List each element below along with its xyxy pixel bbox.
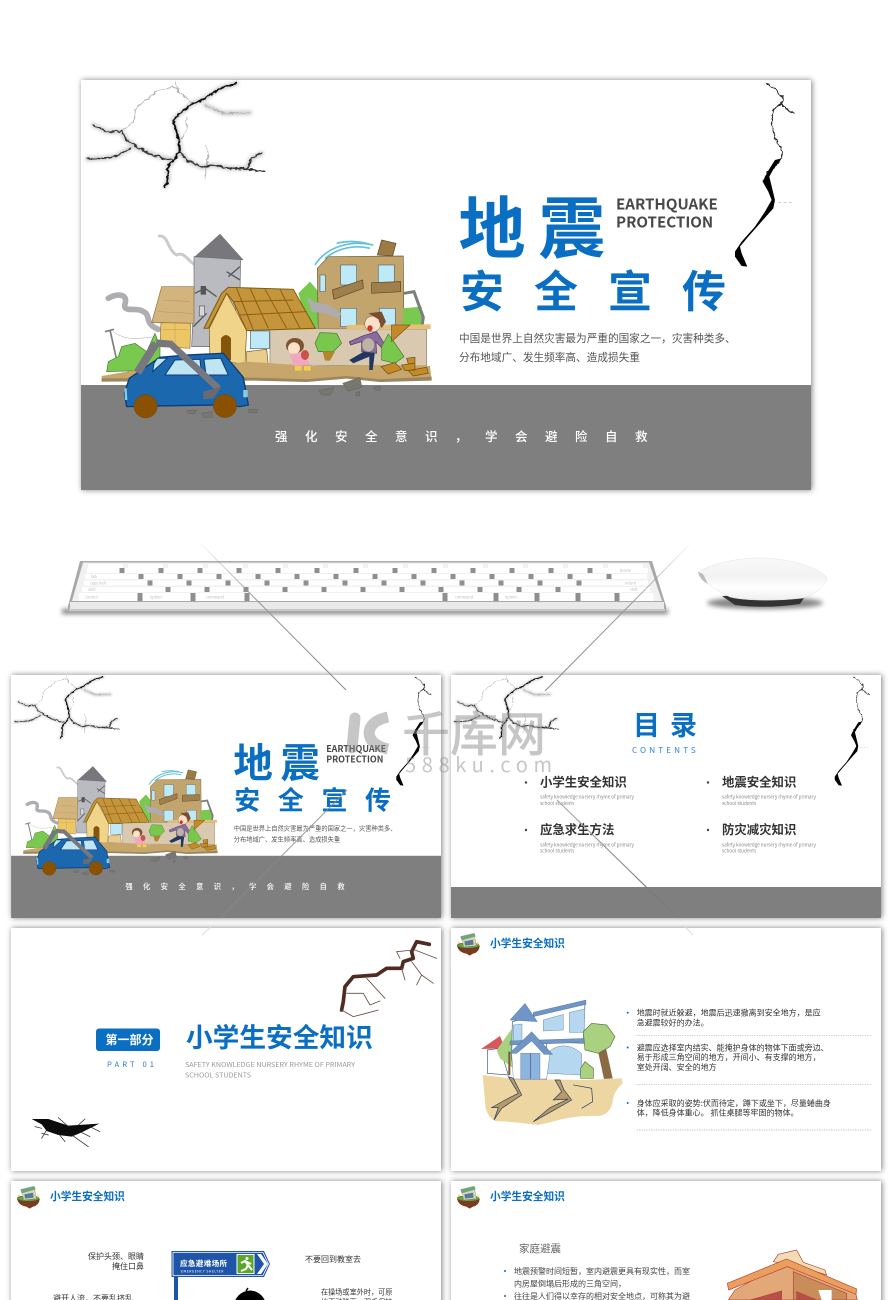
item 1: school students xyxy=(540,800,574,807)
bullet text 2 xyxy=(627,1042,829,1073)
bullet text 1: 急避震较好的办法。 xyxy=(637,1018,709,1029)
contents subtitle: CONTENTS xyxy=(632,744,699,756)
item 4: 防灾减灾知识 xyxy=(722,820,796,838)
thumbnail: knowledge slide xyxy=(451,928,881,1171)
item 3: school students xyxy=(540,847,574,854)
description: 中国是世界上自然灾害最为严重的国家之一，灾害种类多、 xyxy=(459,331,736,346)
keyboard: shift xyxy=(630,587,638,593)
sub heading: 家庭避震 xyxy=(519,1241,561,1256)
thumbnail english: PROTECTION xyxy=(326,752,383,765)
keyboard: tab xyxy=(91,574,97,580)
grey footer band xyxy=(81,385,811,490)
illustration: collapsed town scene xyxy=(102,234,432,418)
thumbnail: home shelter slide xyxy=(451,1181,881,1300)
thumbnail description: 中国是世界上自然灾害最为严重的国家之一，灾害种类多、 xyxy=(234,823,397,832)
thumbnail: shelter slide xyxy=(11,1181,441,1300)
bullet text 3: 身体应采取的姿势:伏而待定，蹲下或坐下，尽量蜷曲身 xyxy=(637,1098,831,1109)
crack left xyxy=(454,676,559,738)
footer slogan: 强化安全意识，学会避险自救 xyxy=(275,426,665,445)
watermark: 588ku.com xyxy=(405,749,552,778)
title: 安全宣传: 安全宣传 xyxy=(460,256,756,320)
section subtitle xyxy=(185,1059,355,1080)
item 1: safety knowledge nursery rhyme of primary xyxy=(540,794,634,801)
right tips xyxy=(305,1254,392,1300)
item 4 xyxy=(707,820,816,854)
subtitle: english xyxy=(616,192,718,232)
item 3: 应急求生方法 xyxy=(540,820,614,838)
crack xyxy=(15,676,119,738)
keyboard: caps lock xyxy=(90,580,107,586)
watermark xyxy=(352,695,552,778)
item 1: 小学生安全知识 xyxy=(540,772,627,790)
illustration: crack top right xyxy=(735,83,794,267)
header title: 小学生安全知识 xyxy=(490,936,565,951)
brown crack xyxy=(342,942,437,1017)
right tips: 在操场或室外时，可原 xyxy=(321,1288,392,1298)
black crack xyxy=(32,1118,100,1147)
item 4: school students xyxy=(722,847,756,854)
badge: part one xyxy=(96,1028,160,1051)
diagonal reflection lines xyxy=(197,540,693,935)
subtitle: english: PROTECTION xyxy=(616,210,713,232)
bullet text 2: 避震应选择室内结实、能掩护身体的物体下面或旁边、 xyxy=(637,1042,829,1053)
section subtitle: SAFETY KNOWLEDGE NURSERY RHYME OF PRIMARY xyxy=(185,1059,355,1069)
bullet list: 内房屋倒塌后形成的三角空间， xyxy=(514,1279,626,1290)
crack right xyxy=(835,677,869,786)
thumbnail slogan: 强化安全意识，学会避险自救 xyxy=(125,881,355,892)
section subtitle: SCHOOL STUDENTS xyxy=(185,1070,251,1080)
bullet list: 地震预警时间短暂，室内避震更具有现实性，而室 xyxy=(514,1266,690,1277)
item 1 xyxy=(525,772,634,807)
left tips: 掩住口鼻 xyxy=(112,1261,144,1272)
keyboard xyxy=(62,561,668,614)
item 2: 地震安全知识 xyxy=(722,772,796,790)
hero slide: earthquake cover xyxy=(81,80,811,490)
thumbnail description: 分布地域广、发生频率高、造成损失重 xyxy=(234,835,340,844)
item 2: school students xyxy=(722,800,756,807)
illustration: crack top left xyxy=(87,82,265,187)
keyboard: command xyxy=(455,594,473,600)
thumbnail: cover slide xyxy=(11,675,441,918)
subtitle: english: EARTHQUAKE xyxy=(616,192,718,214)
town scene xyxy=(23,766,218,875)
illustration: cracked house xyxy=(481,1000,623,1125)
part label: PART 01 xyxy=(107,1059,157,1070)
sign: emergency shelter xyxy=(172,1251,270,1300)
header icon xyxy=(17,1186,40,1209)
silhouette head xyxy=(234,1288,266,1300)
keyboard: command xyxy=(206,594,224,600)
bullet text 1: 地震时就近躲避，地震后迅速撤离到安全地方，是应 xyxy=(637,1008,821,1019)
header icon xyxy=(457,933,480,956)
badge: part one: 第一部分 xyxy=(106,1031,154,1048)
bullet text 1 xyxy=(627,1008,821,1029)
keyboard: option xyxy=(505,594,517,600)
item 4: safety knowledge nursery rhyme of primary xyxy=(722,841,816,848)
illustration: collapsed house xyxy=(727,1250,857,1300)
description: 分布地域广、发生频率高、造成损失重 xyxy=(459,350,640,365)
sign: emergency shelter: 应急避难场所 xyxy=(180,1258,227,1269)
header title: 小学生安全知识 xyxy=(50,1189,125,1204)
thumbnail title: 地震 xyxy=(233,732,328,789)
thumbnail heading: 安全宣传 xyxy=(234,780,409,818)
left tips: 保护头颈、眼睛 xyxy=(88,1251,144,1262)
item 3 xyxy=(525,820,634,854)
bullet text 2: 室处开阔、安全的地方 xyxy=(637,1062,717,1073)
thumbnail: contents slide xyxy=(451,675,881,918)
keyboard: option xyxy=(150,594,162,600)
sign: emergency shelter: EMERGENCY SHELTER xyxy=(181,1268,224,1274)
watermark: 千库网 xyxy=(402,695,546,765)
crack xyxy=(396,677,431,786)
keyboard: shift xyxy=(88,587,96,593)
contents title: 目录 xyxy=(633,704,707,743)
section title: 小学生安全知识 xyxy=(186,1016,373,1055)
bullet text 3: 体，降低身体重心。 抓住桌腿等牢固的物体。 xyxy=(637,1108,798,1119)
item 3: safety knowledge nursery rhyme of primary xyxy=(540,841,634,848)
thumbnail: section divider xyxy=(11,928,441,1171)
item 2 xyxy=(707,772,816,807)
divider xyxy=(637,1129,872,1131)
description xyxy=(459,331,736,365)
divider xyxy=(637,1083,872,1085)
thumbnail english xyxy=(326,742,386,765)
thumbnail english: EARTHQUAKE xyxy=(326,742,386,755)
bullet text 2: 易于形成三角空间的地方，开间小、有支撑的地方， xyxy=(637,1052,821,1063)
header icon xyxy=(457,1186,480,1209)
thumbnail description xyxy=(234,823,397,844)
mouse xyxy=(698,558,827,609)
keyboard: return xyxy=(625,580,636,586)
divider xyxy=(637,1034,872,1036)
keyboard: control xyxy=(85,594,98,600)
bullet text 3 xyxy=(627,1098,831,1119)
title: 地震: 地震 xyxy=(458,176,618,272)
right tips: 不要回到教室去 xyxy=(305,1254,361,1265)
item 2: safety knowledge nursery rhyme of primary xyxy=(722,794,816,801)
left tips xyxy=(53,1251,144,1300)
keyboard: delete xyxy=(620,568,631,574)
bullet list xyxy=(504,1266,690,1300)
header title: 小学生安全知识 xyxy=(490,1189,565,1204)
